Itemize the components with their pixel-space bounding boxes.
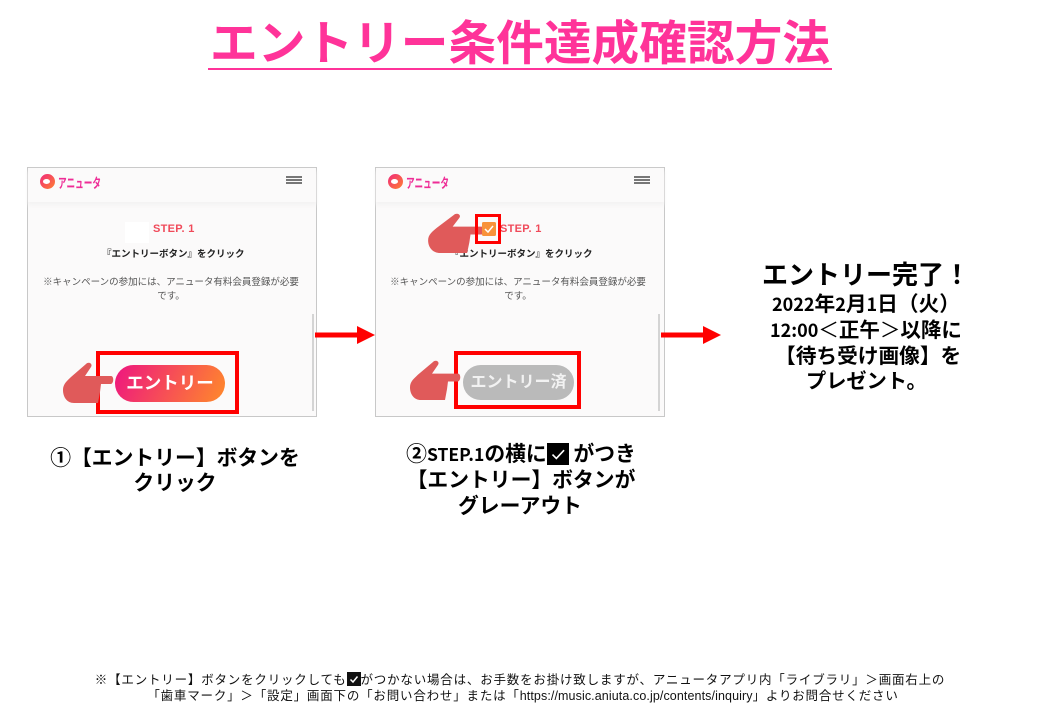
caption: step 2: ②STEP.1の横に がつき — [406, 437, 636, 467]
icon: orange checkbox — [482, 222, 496, 236]
membership note — [43, 276, 299, 302]
date and prize text: 12:00＜正午＞以降に — [770, 313, 962, 343]
step 1 label: STEP. 1 — [153, 223, 195, 235]
instruction: 『エントリーボタン』をクリック — [102, 246, 245, 260]
step 1 label: STEP. 1 — [500, 223, 542, 235]
red highlight: entry button — [96, 351, 239, 414]
completion heading: エントリー完了！ — [762, 255, 970, 292]
membership note: です。 — [157, 291, 185, 302]
membership note: ※キャンペーンの参加には、アニュータ有料会員登録が必要 — [43, 277, 299, 288]
date and prize text: プレゼント。 — [806, 365, 927, 394]
entry button: エントリー — [126, 373, 214, 393]
footnote: 「歯車マーク」＞「設定」画面下の「お問い合わせ」または「https://music.aniuta.co.jp/contents/inquiry」よりお問合せください — [147, 689, 899, 703]
app header: アニュータ — [58, 176, 101, 191]
date and prize text: 2022年2月1日（火） — [772, 287, 960, 317]
footnote: ※【エントリー】ボタンをクリックしても がつかない場合は、お手数をお掛け致しますが、アニュータアプリ内「ライブラリ」＞画面右上の — [95, 673, 945, 687]
icon: pointing hand 3 — [410, 360, 460, 400]
app header — [28, 168, 316, 202]
title: エントリー条件達成確認方法 — [210, 18, 830, 71]
entry button — [115, 365, 225, 402]
caption: step 1: ①【エントリー】ボタンを — [50, 441, 300, 471]
membership note: です。 — [504, 291, 532, 302]
date and prize text: 【待ち受け画像】を — [775, 339, 961, 369]
panel: step 1 screenshot — [27, 167, 317, 417]
caption: step 2: グレーアウト — [458, 489, 582, 519]
arrow: step 2 to complete — [661, 326, 721, 344]
app header: アニュータ — [406, 176, 449, 191]
arrow: step 1 to step 2 — [315, 326, 375, 344]
scrollbar — [658, 314, 660, 411]
red highlight: checkbox — [475, 214, 501, 244]
panel: step 2 screenshot — [375, 167, 665, 417]
date and prize text — [770, 287, 962, 394]
scrollbar — [312, 314, 314, 411]
app header — [376, 168, 664, 202]
icon: pointing hand 1 — [63, 362, 114, 403]
instruction: 『エントリーボタン』をクリック — [450, 246, 593, 260]
membership note — [390, 276, 646, 302]
caption: step 1: クリック — [133, 466, 217, 496]
blank check area — [125, 222, 149, 243]
icon: pointing hand 2 — [428, 214, 482, 253]
grey entry button — [463, 365, 574, 400]
membership note: ※キャンペーンの参加には、アニュータ有料会員登録が必要 — [390, 277, 646, 288]
caption: step 2: 【エントリー】ボタンが — [407, 463, 635, 493]
caption: step 1 — [50, 441, 300, 496]
completion message — [762, 255, 970, 394]
caption: step 2 — [406, 437, 636, 519]
red highlight: grey button — [454, 351, 581, 409]
footnote — [95, 672, 945, 703]
grey entry button: エントリー済 — [470, 374, 566, 391]
